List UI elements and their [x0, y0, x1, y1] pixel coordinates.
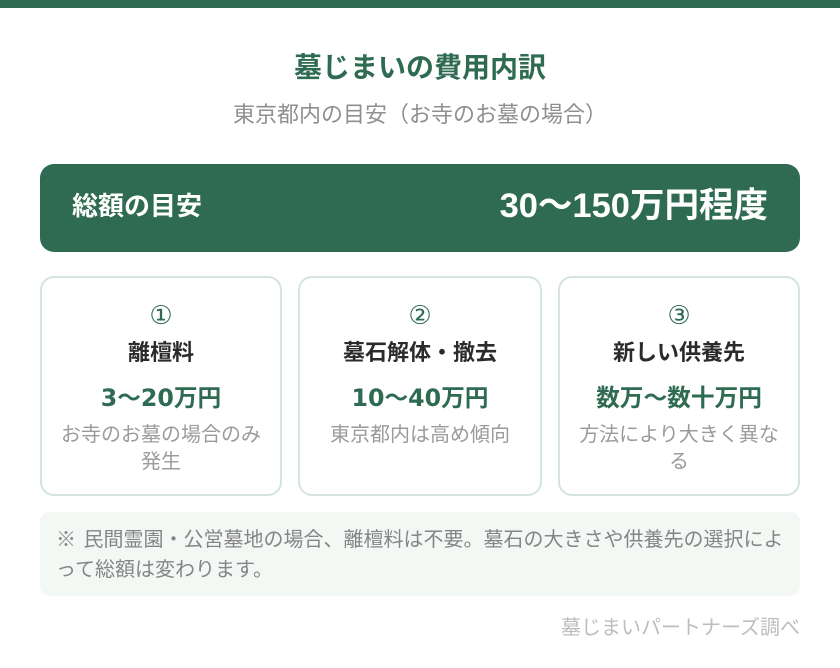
note text: ※ 民間霊園・公営墓地の場合、離檀料は不要。墓石の大きさや供養先の選択によ [56, 529, 784, 551]
panel: card 1 [40, 276, 282, 496]
panel: note [40, 512, 800, 596]
panel: card 2 [298, 276, 542, 496]
card 2 description: 東京都内は高め傾向 [330, 424, 510, 446]
note text: って総額は変わります。 [56, 559, 273, 581]
card 2 heading: 墓石解体・撤去 [343, 340, 497, 365]
total amount: 30～150万円程度 [500, 187, 768, 225]
card 3 description: 方法により大きく異な [579, 424, 779, 446]
card 3 heading: 新しい供養先 [613, 340, 745, 365]
card 3 description: る [669, 451, 689, 473]
card 1 heading: 離檀料 [128, 340, 194, 365]
source credit: 墓じまいパートナーズ調べ [561, 617, 800, 639]
number 3: ③ [667, 301, 691, 331]
panel: total estimate [40, 164, 800, 252]
subtitle: 東京都内の目安（お寺のお墓の場合） [233, 102, 607, 127]
total label: 総額の目安 [72, 191, 202, 221]
number 2: ② [408, 301, 432, 331]
card 1 amount: 3～20万円 [101, 384, 221, 412]
note text [56, 529, 784, 581]
number 1: ① [149, 301, 173, 331]
card 1 description [61, 424, 261, 473]
top accent bar [0, 0, 840, 8]
card 2 amount: 10～40万円 [352, 384, 488, 412]
panel: card 3 [558, 276, 800, 496]
card 1 description: お寺のお墓の場合のみ [61, 424, 261, 446]
card 1 description: 発生 [141, 451, 181, 473]
title: 墓じまいの費用内訳 [294, 52, 546, 83]
card 3 description [579, 424, 779, 473]
card 3 amount: 数万～数十万円 [596, 384, 762, 412]
